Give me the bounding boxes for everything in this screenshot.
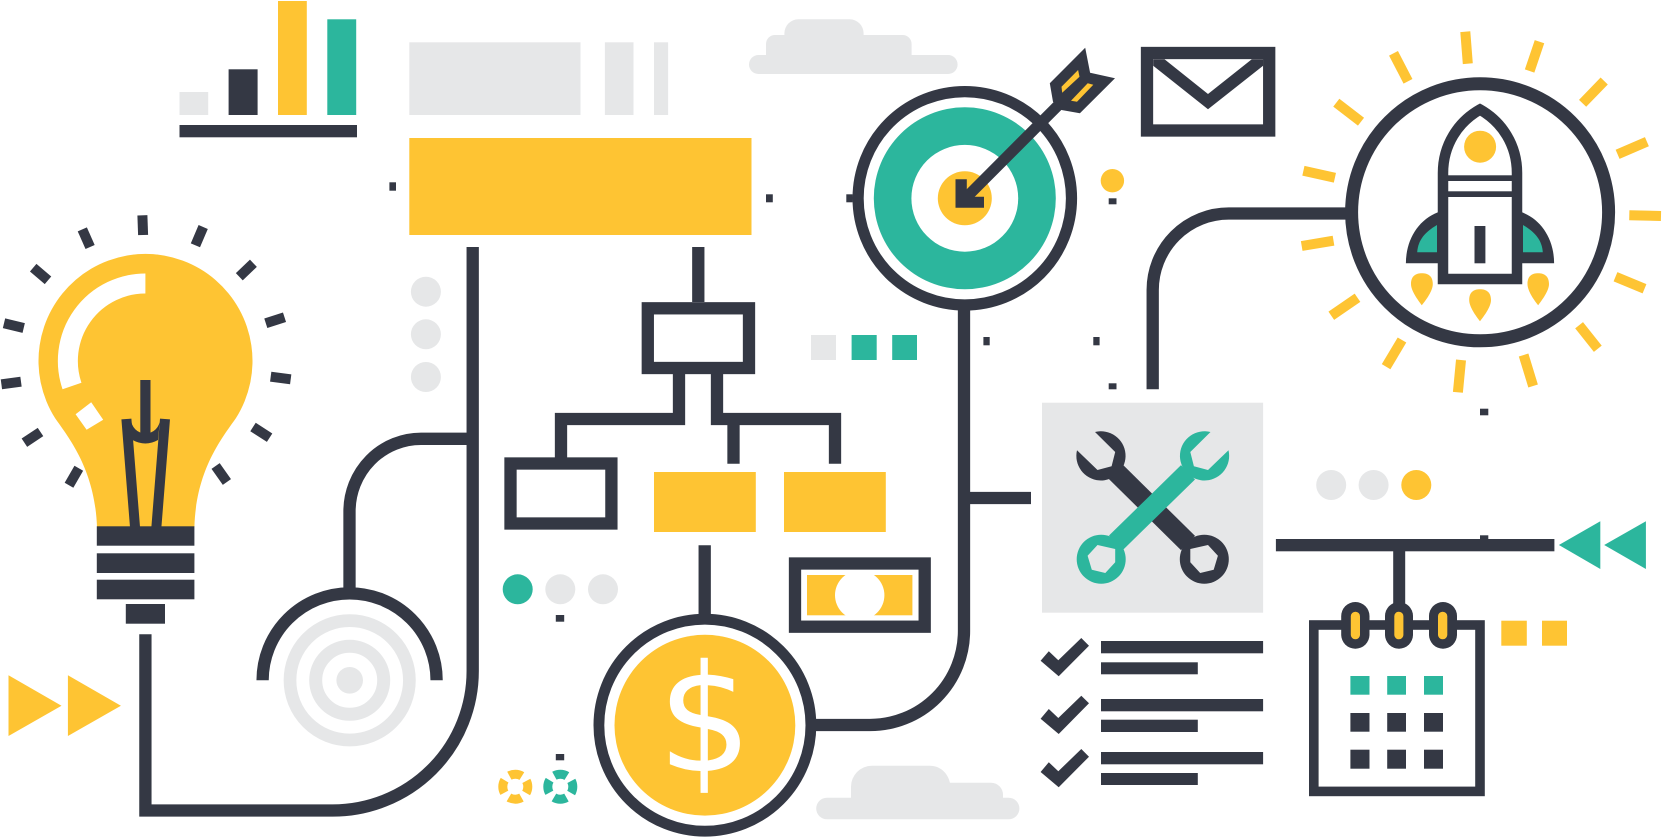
- small square markers: [389, 182, 1488, 760]
- icon: calendar: [1314, 602, 1480, 791]
- icon: rocket in circle: [1352, 84, 1609, 341]
- dots row: teal and gray: [503, 574, 618, 604]
- cloud: top: [749, 19, 958, 74]
- icon: light bulb: [38, 254, 252, 624]
- gray and teal squares: [811, 335, 917, 360]
- org chart: [510, 247, 886, 532]
- yellow squares: [1501, 621, 1567, 646]
- gray dots column: [411, 277, 441, 392]
- connector: header to signal: [350, 439, 473, 590]
- rocket sun rays: [1302, 32, 1661, 392]
- bulb rays: [1, 215, 291, 485]
- connector: bulb to header: [145, 247, 473, 810]
- connector: branch to tools panel: [970, 492, 1031, 504]
- icon: teal ring: [548, 774, 573, 799]
- panel: tools: [1042, 403, 1263, 613]
- bar chart: [180, 1, 357, 137]
- cloud: bottom: [816, 766, 1019, 819]
- icon: banknote: [795, 564, 925, 627]
- arrows: teal rewind: [1559, 521, 1646, 569]
- connector: timeline bar: [1276, 539, 1554, 605]
- connector: tools to rocket: [1153, 213, 1350, 389]
- connector: org chart to coin: [699, 545, 711, 615]
- icon: dollar coin: $: [657, 634, 752, 807]
- icon: dollar coin: [599, 619, 811, 831]
- yellow header block: [409, 138, 752, 235]
- gray header blocks: [409, 42, 668, 115]
- icon: yellow ring: [503, 774, 528, 799]
- icon: signal rings: [263, 593, 437, 740]
- connector: coin to target: [816, 305, 964, 725]
- arrows: yellow fast forward: [8, 675, 121, 736]
- icon: envelope: [1147, 53, 1269, 130]
- yellow dot: [1101, 169, 1124, 192]
- checklist: [1041, 638, 1263, 787]
- icon: target with arrow: [858, 48, 1115, 305]
- dots row: gray and yellow: [1316, 470, 1431, 500]
